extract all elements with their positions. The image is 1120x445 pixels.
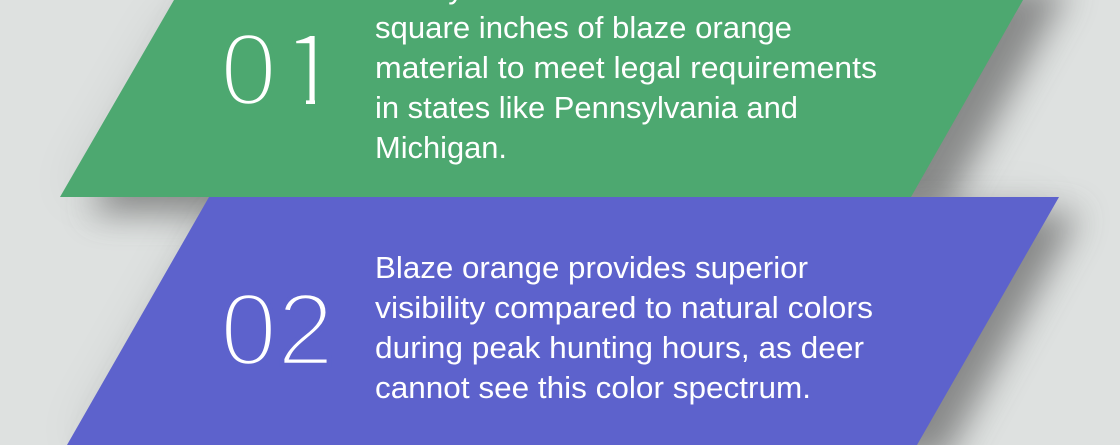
panel: 01: [60, 0, 1023, 197]
text block 01: [375, 0, 877, 165]
panel: 02: [67, 197, 1059, 445]
number 02: 2: [277, 272, 334, 387]
text block 02: during peak hunting hours, as deer: [375, 331, 864, 365]
text block 02: Blaze orange provides superior: [375, 251, 808, 285]
text block 02: cannot see this color spectrum.: [375, 371, 811, 405]
green parallelogram: [60, 0, 1023, 197]
text block 01: Michigan.: [375, 131, 507, 165]
number 01: 0: [220, 12, 277, 127]
purple parallelogram: [67, 197, 1059, 445]
number 02: 0: [220, 272, 277, 387]
shadow: green panel: [60, 0, 1070, 197]
text block 02: [375, 251, 873, 405]
shadow: purple panel: [67, 197, 1080, 445]
text block 01: square inches of blaze orange: [375, 11, 792, 45]
text block 01: material to meet legal requirements: [375, 51, 877, 85]
number 02: [220, 272, 334, 387]
text block 02: visibility compared to natural colors: [375, 291, 873, 325]
text block 01: in states like Pennsylvania and: [375, 91, 798, 125]
number 01: [220, 0, 340, 136]
